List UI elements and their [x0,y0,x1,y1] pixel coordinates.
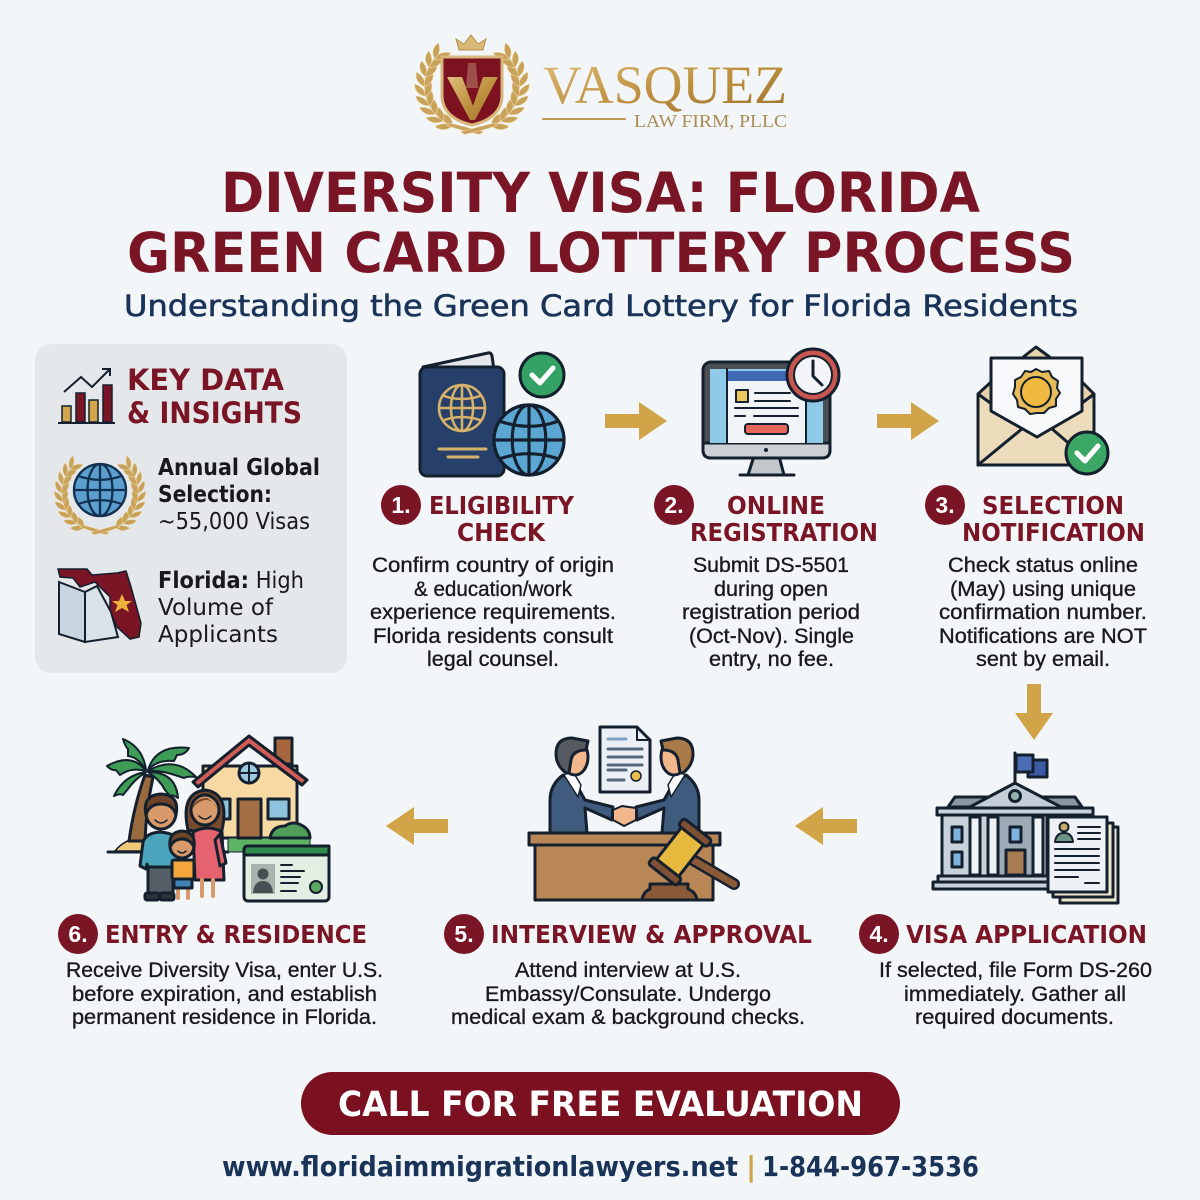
step number 6 [58,914,98,954]
step number 5: 5. [454,921,474,947]
arrow: step 3 to 4 [1015,684,1053,740]
step 1 text: legal counsel. [427,647,559,671]
step 1 text: & education/work [414,577,572,601]
step 5 text: medical exam & background checks. [451,1005,805,1029]
step 1 text: Confirm country of origin [372,553,614,577]
icon: government building with documents [933,753,1118,903]
stat: Florida applicants: Florida: High [158,568,304,594]
step number 5 [444,914,484,954]
icon: Florida map [58,569,141,642]
step 2 text: (Oct-Nov). Single [689,624,854,648]
step 3 [925,485,1147,671]
step 3 heading: NOTIFICATION [962,518,1145,547]
contact line: www.floridaimmigrationlawyers.net [222,1150,738,1183]
step 1 text [370,553,616,671]
title: DIVERSITY VISA: FLORIDA [221,161,980,225]
arrow: step 5 to 6 [386,807,448,845]
step number 3 [925,485,965,525]
step 3 text: (May) using unique [950,577,1136,601]
step 3 text: Check status online [948,553,1138,577]
title [127,161,1075,285]
step number 1: 1. [391,492,411,518]
stat: annual global selection: ~55,000 Visas [158,509,310,535]
icon: computer with clock [703,349,839,475]
step 6 text: permanent residence in Florida. [72,1005,377,1029]
step 2 heading [690,491,878,547]
step 5 [444,914,812,1029]
step 6 text: before expiration, and establish [72,982,377,1006]
step 4 text: immediately. Gather all [904,982,1126,1006]
step number 6: 6. [68,921,88,947]
icon: globe with wreath [54,455,146,535]
step 4 heading: VISA APPLICATION [906,920,1147,949]
step number 3: 3. [935,492,955,518]
step 5 text: Embassy/Consulate. Undergo [485,982,771,1006]
icon: envelope with seal [978,347,1108,474]
step 6 [58,914,383,1029]
step number 1 [381,485,421,525]
stat: Florida applicants: Applicants [158,622,278,648]
call to action button: CALL FOR FREE EVALUATION [338,1085,863,1125]
stat: annual global selection: Selection: [158,482,272,508]
step 4 text [879,958,1152,1029]
icon: shield [442,57,502,125]
step 3 heading: SELECTION [982,491,1124,520]
step 6 text: Receive Diversity Visa, enter U.S. [66,958,383,982]
step 2 text: registration period [682,600,860,624]
arrow: step 1 to 2 [605,402,667,440]
call to action button [301,1072,900,1135]
step 1 heading [429,491,575,547]
arrow: step 4 to 5 [795,807,857,845]
step 1 heading: ELIGIBILITY [429,491,575,520]
logo wordmark: VASQUEZ [543,55,787,115]
stat: Florida applicants: Volume of [158,595,274,621]
step 5 text [451,958,805,1029]
title: GREEN CARD LOTTERY PROCESS [127,221,1075,285]
step 2 text: Submit DS-5501 [693,553,849,577]
icon: passport and globe [420,353,564,476]
step number 2: 2. [664,492,684,518]
step 3 text [939,553,1147,671]
step 4 text: required documents. [915,1005,1114,1029]
icon: crown [456,35,486,50]
panel heading: & INSIGHTS [127,396,302,430]
step number 2 [654,485,694,525]
step 1 text: Florida residents consult [373,624,613,648]
stat: Florida applicants [158,568,304,648]
step 1 text: experience requirements. [370,600,616,624]
stat: annual global selection: Annual Global [158,455,320,481]
step 3 text: Notifications are NOT [939,624,1147,648]
step 2 [654,485,878,671]
stat: annual global selection [158,455,320,535]
panel heading [127,363,302,430]
step 4 text: If selected, file Form DS-260 [879,958,1152,982]
subtitle: Understanding the Green Card Lottery for Florida Residents [124,289,1078,323]
step 6 heading: ENTRY & RESIDENCE [105,920,367,949]
step 4 [859,914,1152,1029]
logo [414,35,787,134]
contact line: | [746,1150,756,1183]
step 3 text: sent by email. [976,647,1110,671]
step 2 heading: REGISTRATION [690,518,878,547]
icon: family, home and green card [107,736,329,901]
step 1 heading: CHECK [457,518,547,547]
icon: bar chart [58,369,115,423]
icon: wreath [414,42,530,134]
icon: handshake at desk with gavel [529,727,734,900]
step 1 [370,485,616,671]
step 2 text: entry, no fee. [709,647,834,671]
step 2 text [682,553,860,671]
step 2 text: during open [714,577,828,601]
logo rule [542,118,626,120]
step 3 text: confirmation number. [939,600,1147,624]
arrow: step 2 to 3 [877,402,939,440]
step 2 heading: ONLINE [727,491,825,520]
panel heading: KEY DATA [127,363,285,397]
step number 4 [859,914,899,954]
step 3 heading [962,491,1145,547]
step 5 text: Attend interview at U.S. [515,958,741,982]
step number 4: 4. [869,921,889,947]
step 5 heading: INTERVIEW & APPROVAL [491,920,812,949]
panel: key data and insights [35,344,347,673]
step 6 text [66,958,383,1029]
logo subtitle: LAW FIRM, PLLC [634,111,787,131]
contact line: 1-844-967-3536 [762,1150,979,1183]
